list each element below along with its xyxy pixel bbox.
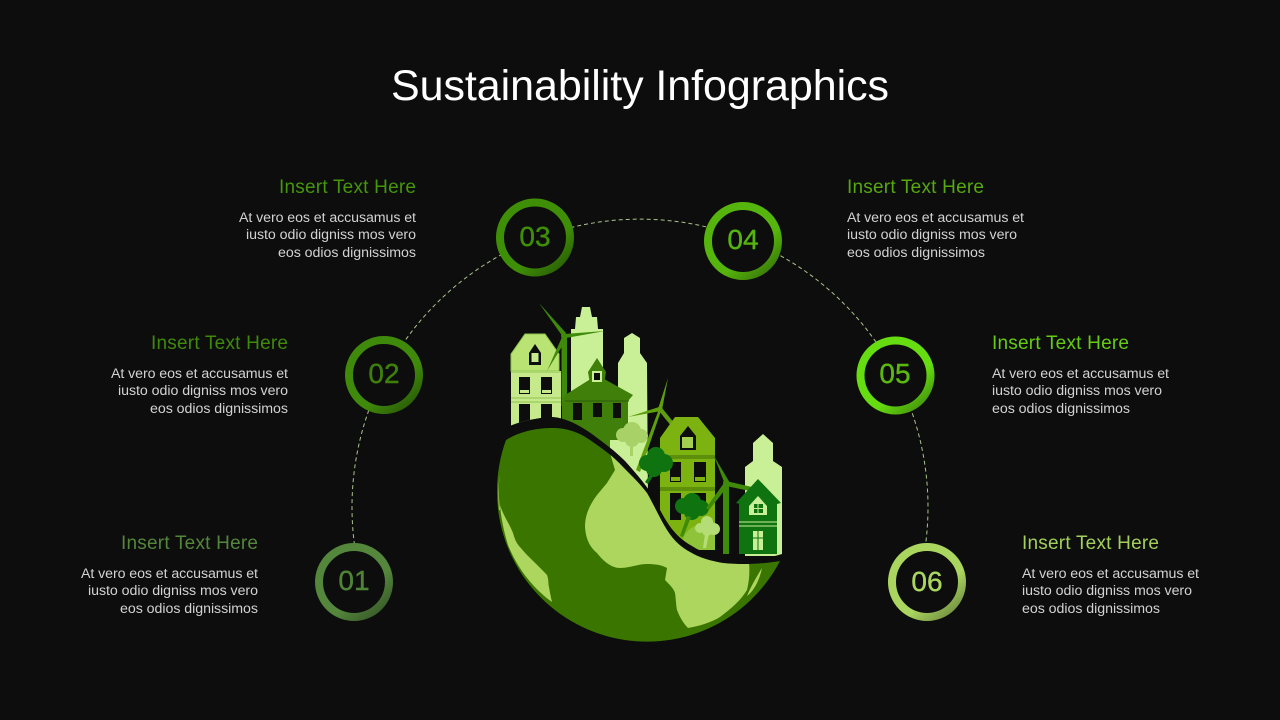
body text 01: At vero eos et accusamus et	[81, 566, 258, 582]
tree: light small	[695, 516, 720, 548]
item 04	[708, 177, 1024, 276]
wind turbine: middle	[628, 378, 675, 472]
tree: dark green	[639, 447, 673, 484]
body text 01: iusto odio digniss mos vero	[88, 583, 258, 599]
body text 03: iusto odio digniss mos vero	[246, 227, 416, 243]
city skyline	[511, 303, 782, 556]
ring 05: 05	[879, 358, 911, 389]
body text 01	[81, 566, 258, 617]
heading 06: Insert Text Here	[1022, 533, 1159, 554]
ring 02	[349, 340, 419, 410]
ring 01	[319, 547, 389, 617]
ring 04: 04	[727, 224, 759, 255]
body text 01: eos odios dignissimos	[120, 601, 258, 617]
title: Sustainability Infographics	[391, 62, 889, 110]
globe	[497, 428, 780, 642]
tower: back right	[618, 333, 648, 500]
body text 03: At vero eos et accusamus et	[239, 210, 416, 226]
body text 06: iusto odio digniss mos vero	[1022, 583, 1192, 599]
item 06	[892, 533, 1199, 617]
ring 03: 03	[519, 221, 551, 252]
wind turbine: right	[706, 456, 752, 554]
item 05	[860, 333, 1169, 417]
ring 06: 06	[911, 566, 943, 597]
body text 04: iusto odio digniss mos vero	[847, 227, 1017, 243]
ring 05	[860, 340, 930, 410]
body text 04: eos odios dignissimos	[847, 245, 985, 261]
ring 03	[500, 202, 570, 272]
body text 05: At vero eos et accusamus et	[992, 366, 1169, 382]
ring 02: 02	[368, 358, 400, 389]
body text 06: eos odios dignissimos	[1022, 601, 1160, 617]
body text 05: eos odios dignissimos	[992, 401, 1130, 417]
land: right sliver	[747, 568, 762, 596]
wind turbine: left	[539, 303, 605, 406]
body text 04	[847, 210, 1024, 261]
house: deep green right	[736, 479, 781, 554]
body text 04: At vero eos et accusamus et	[847, 210, 1024, 226]
heading 02: Insert Text Here	[151, 333, 288, 354]
land: left continent	[500, 505, 552, 602]
illustration: green city on globe	[490, 303, 790, 650]
house: pale left	[511, 334, 561, 431]
item 03	[239, 177, 570, 272]
house: lime	[660, 417, 715, 550]
heading 04: Insert Text Here	[847, 177, 984, 198]
body text 02: At vero eos et accusamus et	[111, 366, 288, 382]
tower: back centre	[571, 307, 603, 400]
item 01	[81, 533, 389, 617]
body text 06	[1022, 566, 1199, 617]
tree: pale	[616, 422, 648, 456]
body text 02: iusto odio digniss mos vero	[118, 383, 288, 399]
body text 03: eos odios dignissimos	[278, 245, 416, 261]
globe ocean	[497, 428, 780, 642]
item 02	[111, 333, 419, 417]
land: central continent	[585, 440, 749, 628]
body text 05: iusto odio digniss mos vero	[992, 383, 1162, 399]
dashed connector arc	[352, 219, 928, 545]
tree: green	[675, 493, 709, 537]
house: dark green centre	[562, 358, 633, 454]
body text 02	[111, 366, 288, 417]
ring 06	[892, 547, 962, 617]
body text 02: eos odios dignissimos	[150, 401, 288, 417]
land: left highlight	[498, 473, 500, 510]
tower: far right	[745, 434, 782, 556]
ring 01: 01	[338, 565, 370, 596]
body text 03	[239, 210, 416, 261]
body text 06: At vero eos et accusamus et	[1022, 566, 1199, 582]
heading 01: Insert Text Here	[121, 533, 258, 554]
body text 05	[992, 366, 1169, 417]
heading 03: Insert Text Here	[279, 177, 416, 198]
heading 05: Insert Text Here	[992, 333, 1129, 354]
ring 04	[708, 206, 778, 276]
black wave band	[500, 417, 782, 564]
